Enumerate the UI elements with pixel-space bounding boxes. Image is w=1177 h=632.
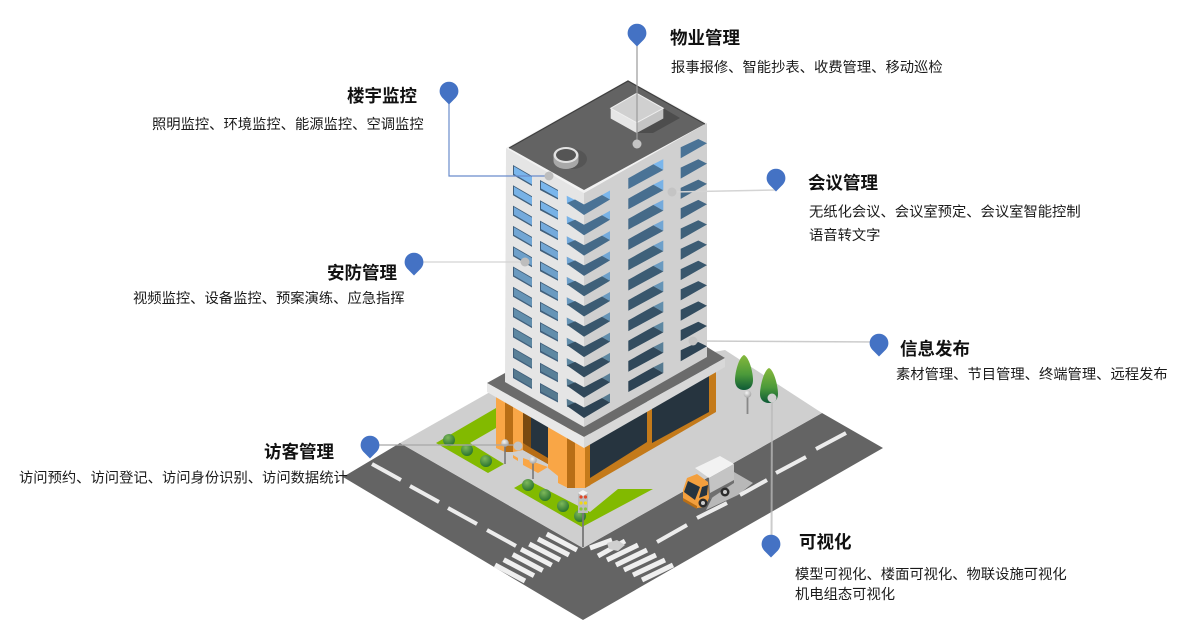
label: 访客管理: [19, 442, 348, 486]
label: 安防管理: 视频监控、设备监控、预案演练、应急指挥: [133, 289, 405, 307]
label: 会议管理: 无纸化会议、会议室预定、会议室智能控制: [809, 204, 1081, 220]
label: 物业管理: 物业管理: [670, 28, 740, 48]
street lamps: [501, 390, 751, 479]
traffic light: [578, 490, 588, 547]
pin: 安防管理: [405, 253, 423, 276]
label: 会议管理: [808, 173, 1081, 244]
roof unit: [611, 93, 680, 133]
connector: 物业管理: [632, 45, 642, 148]
connector: 会议管理: [668, 188, 776, 196]
podium slab: [487, 347, 725, 448]
sidewalk: [400, 350, 822, 548]
ground floor: left facade: [496, 395, 590, 488]
connector: 可视化: [768, 394, 776, 544]
roof vent: [554, 147, 587, 169]
connector: 安防管理: [414, 258, 530, 266]
road markings: [372, 433, 846, 546]
label: 楼宇监控: [152, 86, 424, 133]
pin: 物业管理: [628, 24, 646, 47]
crosswalk: right: [590, 540, 673, 580]
roof: [506, 80, 707, 193]
pin: 会议管理: [767, 169, 785, 192]
label: 信息发布: 素材管理、节目管理、终端管理、远程发布: [896, 366, 1168, 383]
connector: 楼宇监控: [449, 100, 554, 180]
lawn: left: [436, 408, 504, 473]
label: 可视化: 模型可视化、楼面可视化、物联设施可视化: [795, 566, 1067, 583]
crosswalk marker: [607, 540, 625, 551]
label: 楼宇监控: 楼宇监控: [347, 86, 417, 106]
label: 物业管理: [670, 28, 943, 76]
label: 可视化: 可视化: [799, 532, 852, 552]
pin: 楼宇监控: [440, 82, 458, 104]
label: 楼宇监控: 照明监控、环境监控、能源监控、空调监控: [152, 115, 424, 133]
label: 信息发布: 信息发布: [900, 339, 970, 359]
truck shadow: [706, 472, 753, 510]
tower windows: [513, 139, 707, 418]
label: 物业管理: 报事报修、智能抄表、收费管理、移动巡检: [671, 59, 943, 76]
tower walls: [505, 123, 707, 427]
label: 可视化: [795, 532, 1067, 603]
connector: 访客管理: [370, 442, 522, 450]
label: 访客管理: 访问预约、访问登记、访问身份识别、访问数据统计: [19, 470, 348, 486]
ground floor: storefront: [585, 365, 716, 488]
label: 会议管理: 语音转文字: [809, 227, 880, 244]
label: 会议管理: 会议管理: [808, 173, 878, 193]
bushes: [443, 434, 586, 522]
truck: [683, 456, 734, 509]
label: 访客管理: 访客管理: [264, 442, 334, 462]
road: [343, 413, 883, 620]
trees: [735, 355, 778, 403]
label: 信息发布: [896, 339, 1168, 383]
label: 可视化: 机电组态可视化: [795, 586, 895, 603]
connector: 信息发布: [688, 336, 879, 346]
label: 安防管理: 安防管理: [327, 263, 397, 283]
label: 安防管理: [133, 263, 405, 307]
lawn: front: [514, 480, 653, 527]
pin: 访客管理: [361, 436, 379, 458]
pin: 信息发布: [870, 334, 888, 356]
crosswalk: left: [495, 534, 577, 581]
pin: 可视化: [762, 535, 780, 558]
